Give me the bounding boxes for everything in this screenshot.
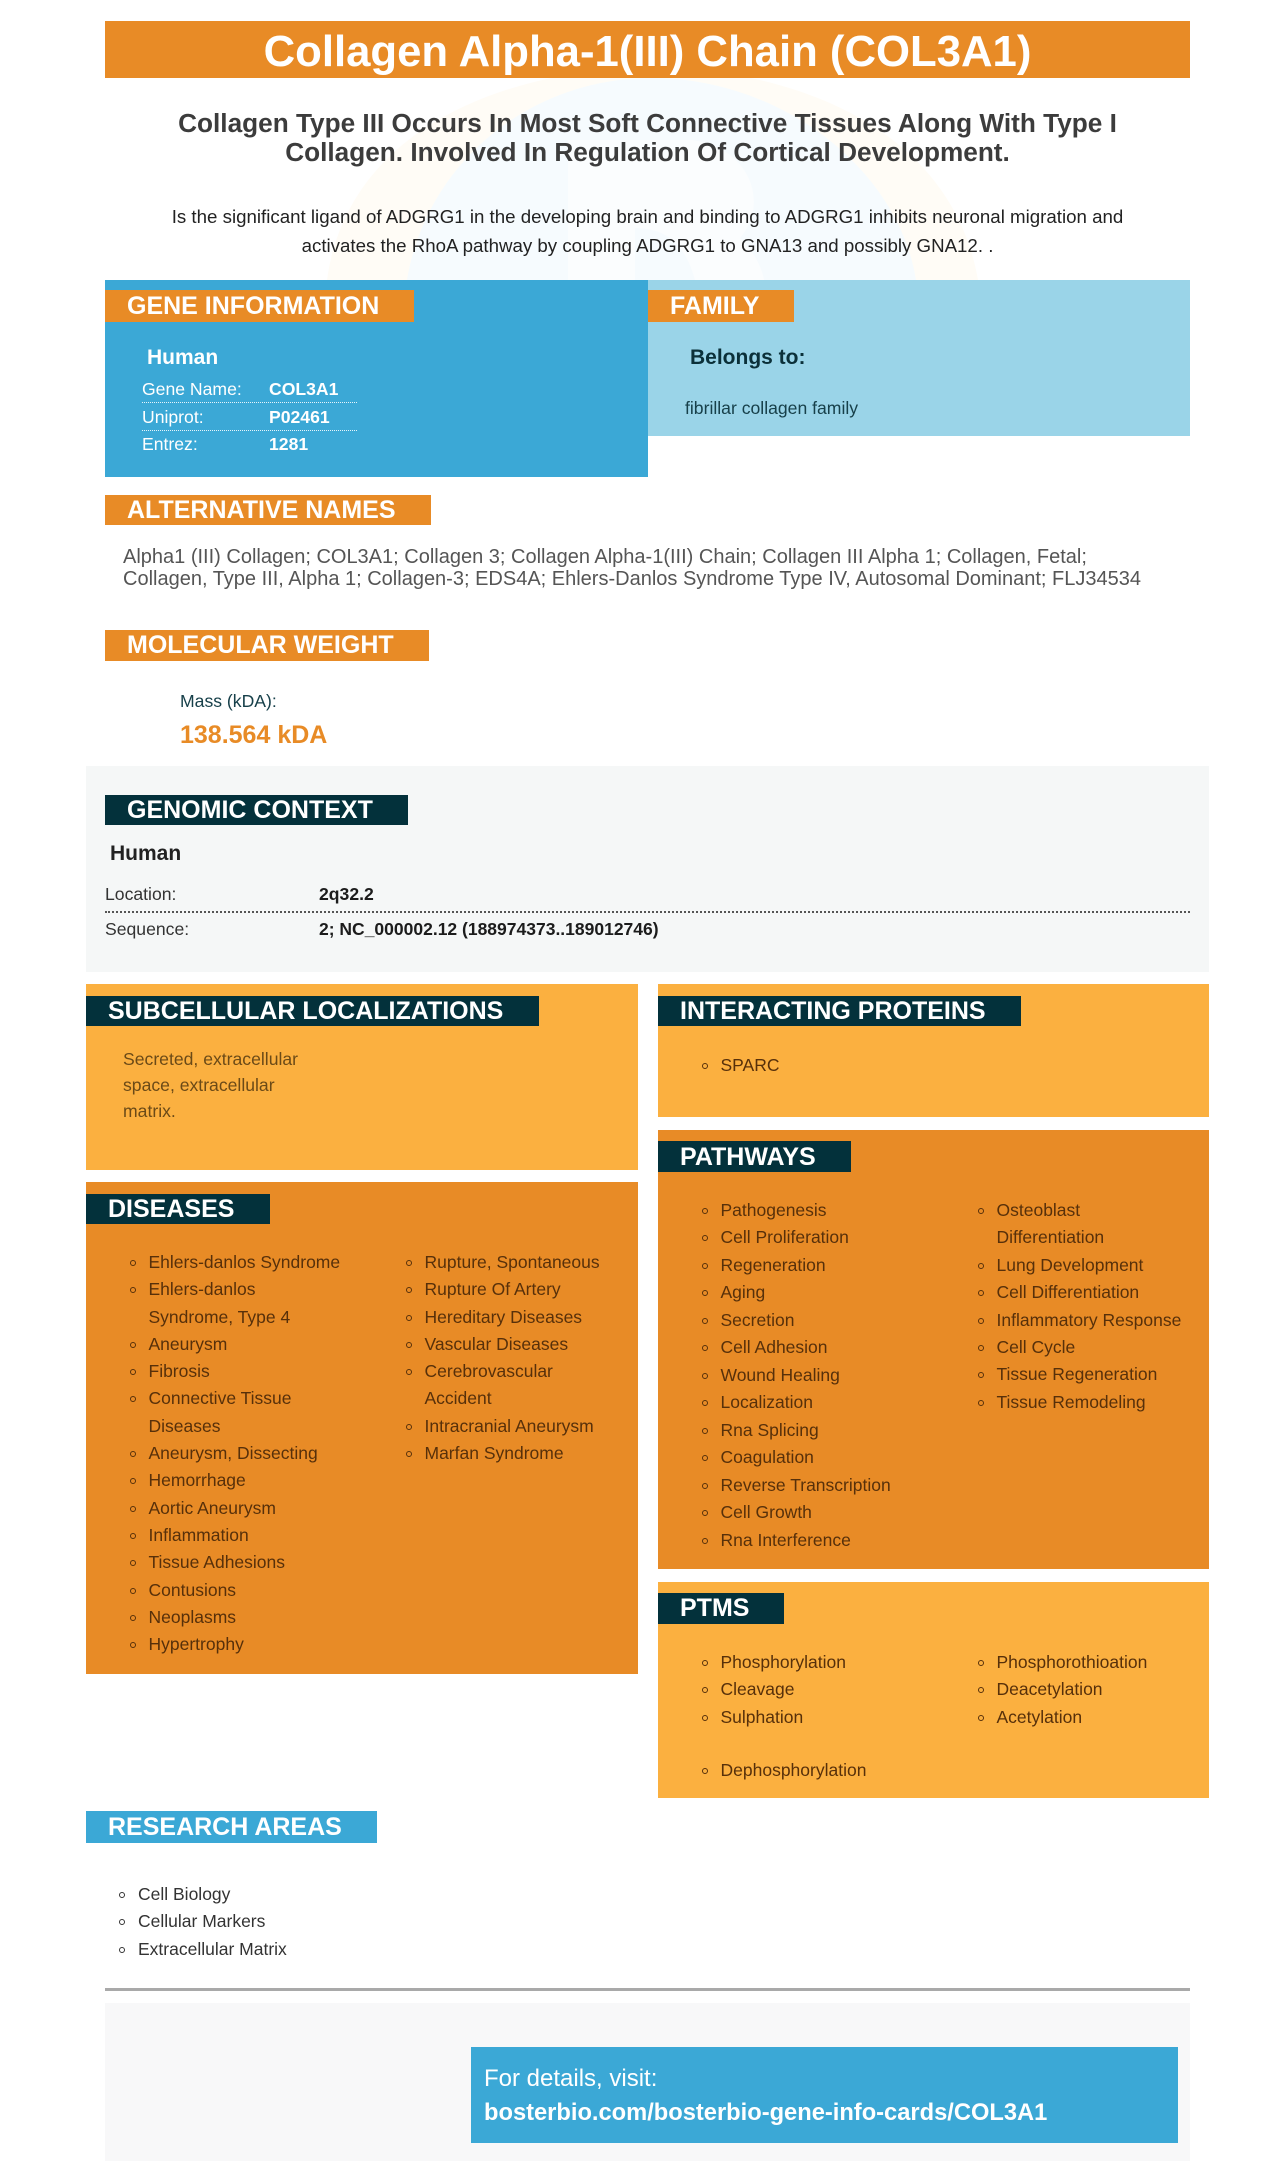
pathway list column 1: Aging bbox=[720, 1282, 765, 1302]
uniprot row: Uniprot: bbox=[142, 407, 204, 427]
family value: fibrillar collagen family bbox=[685, 398, 858, 418]
footer panel bbox=[105, 2003, 1190, 2161]
pathway list column 1: Coagulation bbox=[720, 1447, 814, 1467]
pathway list column 1 bbox=[702, 1200, 891, 1550]
ptm list column 2: Acetylation bbox=[996, 1707, 1082, 1727]
research areas list: Extracellular Matrix bbox=[138, 1939, 287, 1959]
disease list column 1: Tissue Adhesions bbox=[148, 1552, 285, 1572]
disease list column 1: Inflammation bbox=[148, 1525, 249, 1545]
pathway list column 1: Wound Healing bbox=[720, 1365, 840, 1385]
disease list column 2: Rupture, Spontaneous bbox=[424, 1252, 600, 1272]
localization text: Secreted, extracellular bbox=[123, 1049, 298, 1069]
heading: alternative names: ALTERNATIVE NAMES bbox=[127, 496, 396, 524]
heading: genomic context: GENOMIC CONTEXT bbox=[127, 796, 373, 824]
call to action box bbox=[471, 2047, 1178, 2143]
disease list column 2: Rupture Of Artery bbox=[424, 1279, 561, 1299]
interacting protein list: SPARC bbox=[720, 1055, 780, 1075]
disease list column 2: Hereditary Diseases bbox=[424, 1307, 582, 1327]
heading: family bbox=[648, 290, 794, 322]
localization text: matrix. bbox=[123, 1101, 176, 1121]
research areas list bbox=[119, 1884, 287, 1959]
pathway list column 1: Localization bbox=[720, 1392, 813, 1412]
ptm list column 1: Cleavage bbox=[720, 1679, 794, 1699]
disease list column 1 bbox=[130, 1252, 340, 1654]
disease list column 2: Accident bbox=[424, 1388, 492, 1408]
gene name row: Gene Name: bbox=[142, 379, 242, 399]
disease list column 2 bbox=[406, 1252, 600, 1463]
disease list column 1: Aortic Aneurysm bbox=[148, 1498, 276, 1518]
pathway list column 2: Tissue Remodeling bbox=[996, 1392, 1146, 1412]
location row bbox=[105, 882, 1190, 913]
pathway list column 1: Cell Growth bbox=[720, 1502, 812, 1522]
species label: Human bbox=[110, 842, 181, 865]
pathway list column 1: Cell Proliferation bbox=[720, 1227, 849, 1247]
disease list column 2: Vascular Diseases bbox=[424, 1334, 568, 1354]
heading: interacting proteins: INTERACTING PROTEINS bbox=[680, 997, 986, 1025]
pathway list column 1: Rna Splicing bbox=[720, 1420, 819, 1440]
pathway list column 1: Cell Adhesion bbox=[720, 1337, 828, 1357]
heading: ptms bbox=[658, 1593, 784, 1624]
subtitle bbox=[178, 108, 1117, 167]
visit prompt: For details, visit: bbox=[484, 2065, 657, 2092]
panel: diseases bbox=[86, 1182, 638, 1674]
heading: pathways: PATHWAYS bbox=[680, 1143, 816, 1171]
mass label: Mass (kDA): bbox=[180, 691, 277, 711]
heading: diseases: DISEASES bbox=[108, 1195, 234, 1223]
description paragraph: Is the significant ligand of ADGRG1 in the developing brain and binding to ADGRG1 inhibits neuronal migration and bbox=[172, 206, 1123, 227]
disease list column 2: Cerebrovascular bbox=[424, 1361, 553, 1381]
disease list column 1: Aneurysm, Dissecting bbox=[148, 1443, 318, 1463]
disease list column 1: Ehlers-danlos bbox=[148, 1279, 256, 1299]
disease list column 1: Neoplasms bbox=[148, 1607, 236, 1627]
alternative names text: Alpha1 (III) Collagen; COL3A1; Collagen 3; Collagen Alpha-1(III) Chain; Collagen III Alpha 1; Collagen, Fetal; bbox=[123, 546, 1087, 568]
disease list column 1: Contusions bbox=[148, 1580, 236, 1600]
heading: pathways bbox=[658, 1141, 851, 1172]
disease list column 1: Aneurysm bbox=[148, 1334, 227, 1354]
disease list column 1: Hypertrophy bbox=[148, 1634, 244, 1654]
mass value: 138.564 kDA bbox=[180, 721, 327, 749]
description paragraph bbox=[172, 206, 1123, 256]
location row: Location: bbox=[105, 884, 176, 904]
belongs to label: Belongs to: bbox=[690, 346, 806, 369]
ptm list column 2 bbox=[978, 1652, 1147, 1727]
panel: subcellular localizations bbox=[86, 984, 638, 1170]
panel: genomic context bbox=[86, 766, 1209, 972]
gene name row: COL3A1 bbox=[269, 379, 338, 399]
sequence row: 2; NC_000002.12 (188974373..189012746) bbox=[319, 919, 659, 939]
disease list column 1: Ehlers-danlos Syndrome bbox=[148, 1252, 340, 1272]
pathway list column 2: Cell Cycle bbox=[996, 1337, 1075, 1357]
entrez row: 1281 bbox=[269, 434, 308, 454]
panel: gene information bbox=[105, 280, 648, 477]
pathway list column 2: Cell Differentiation bbox=[996, 1282, 1139, 1302]
ptm list column 1 bbox=[702, 1652, 866, 1780]
entrez row bbox=[142, 434, 308, 454]
title banner: Collagen Alpha-1(III) Chain (COL3A1) bbox=[264, 27, 1031, 76]
description paragraph: activates the RhoA pathway by coupling ADGRG1 to GNA13 and possibly GNA12. . bbox=[302, 235, 993, 256]
footer divider bbox=[105, 1988, 1190, 1991]
heading: family: FAMILY bbox=[670, 292, 759, 320]
localization text bbox=[123, 1049, 298, 1121]
pathway list column 2: Osteoblast bbox=[996, 1200, 1080, 1220]
subtitle: Collagen Type III Occurs In Most Soft Connective Tissues Along With Type I bbox=[178, 108, 1117, 138]
heading: ptms: PTMS bbox=[680, 1594, 749, 1622]
ptm list column 1: Sulphation bbox=[720, 1707, 803, 1727]
pathway list column 2: Lung Development bbox=[996, 1255, 1143, 1275]
uniprot row: P02461 bbox=[269, 407, 330, 427]
ptm list column 2: Phosphorothioation bbox=[996, 1652, 1147, 1672]
ptm list column 1: Dephosphorylation bbox=[720, 1760, 866, 1780]
localization text: space, extracellular bbox=[123, 1075, 275, 1095]
uniprot row bbox=[142, 404, 357, 431]
disease list column 1: Diseases bbox=[148, 1416, 220, 1436]
gene name row bbox=[142, 376, 357, 403]
pathway list column 1: Pathogenesis bbox=[720, 1200, 827, 1220]
disease list column 1: Connective Tissue bbox=[148, 1388, 292, 1408]
research areas list: Cell Biology bbox=[138, 1884, 230, 1904]
background watermark logo bbox=[327, 78, 978, 280]
heading: research areas: RESEARCH AREAS bbox=[108, 1813, 342, 1841]
alternative names text: Collagen, Type III, Alpha 1; Collagen-3; EDS4A; Ehlers-Danlos Syndrome Type IV, Autosomal Dominant; FLJ34534 bbox=[123, 568, 1141, 590]
pathway list column 2: Inflammatory Response bbox=[996, 1310, 1181, 1330]
disease list column 1: Hemorrhage bbox=[148, 1470, 246, 1490]
heading: diseases bbox=[86, 1194, 270, 1224]
disease list column 1: Fibrosis bbox=[148, 1361, 210, 1381]
pathway list column 2 bbox=[978, 1200, 1181, 1412]
entrez row: Entrez: bbox=[142, 434, 198, 454]
location row: 2q32.2 bbox=[319, 884, 374, 904]
research areas list: Cellular Markers bbox=[138, 1911, 265, 1931]
panel: family bbox=[648, 280, 1190, 436]
heading: gene information: GENE INFORMATION bbox=[127, 292, 379, 320]
alternative names text bbox=[123, 546, 1141, 590]
pathway list column 2: Differentiation bbox=[996, 1227, 1104, 1247]
disease list column 2: Intracranial Aneurysm bbox=[424, 1416, 594, 1436]
disease list column 1: Syndrome, Type 4 bbox=[148, 1307, 290, 1327]
panel: ptms bbox=[658, 1582, 1209, 1798]
pathway list column 1: Regeneration bbox=[720, 1255, 826, 1275]
species label: Human bbox=[147, 346, 218, 369]
url: bosterbio.com/bosterbio-gene-info-cards/COL3A1 bbox=[484, 2100, 1047, 2126]
sequence row bbox=[105, 919, 659, 939]
ptm list column 1: Phosphorylation bbox=[720, 1652, 846, 1672]
panel: interacting proteins bbox=[658, 984, 1209, 1117]
pathway list column 1: Secretion bbox=[720, 1310, 794, 1330]
disease list column 2: Marfan Syndrome bbox=[424, 1443, 564, 1463]
title banner bbox=[105, 21, 1190, 78]
pathway list column 2: Tissue Regeneration bbox=[996, 1364, 1157, 1384]
pathway list column 1: Reverse Transcription bbox=[720, 1475, 891, 1495]
panel: pathways bbox=[658, 1130, 1209, 1569]
ptm list column 2: Deacetylation bbox=[996, 1679, 1103, 1699]
heading: molecular weight: MOLECULAR WEIGHT bbox=[127, 631, 394, 659]
subtitle: Collagen. Involved In Regulation Of Cortical Development. bbox=[285, 137, 1010, 167]
pathway list column 1: Rna Interference bbox=[720, 1530, 851, 1550]
sequence row: Sequence: bbox=[105, 919, 189, 939]
heading: subcellular localizations: SUBCELLULAR LOCALIZATIONS bbox=[108, 997, 503, 1025]
